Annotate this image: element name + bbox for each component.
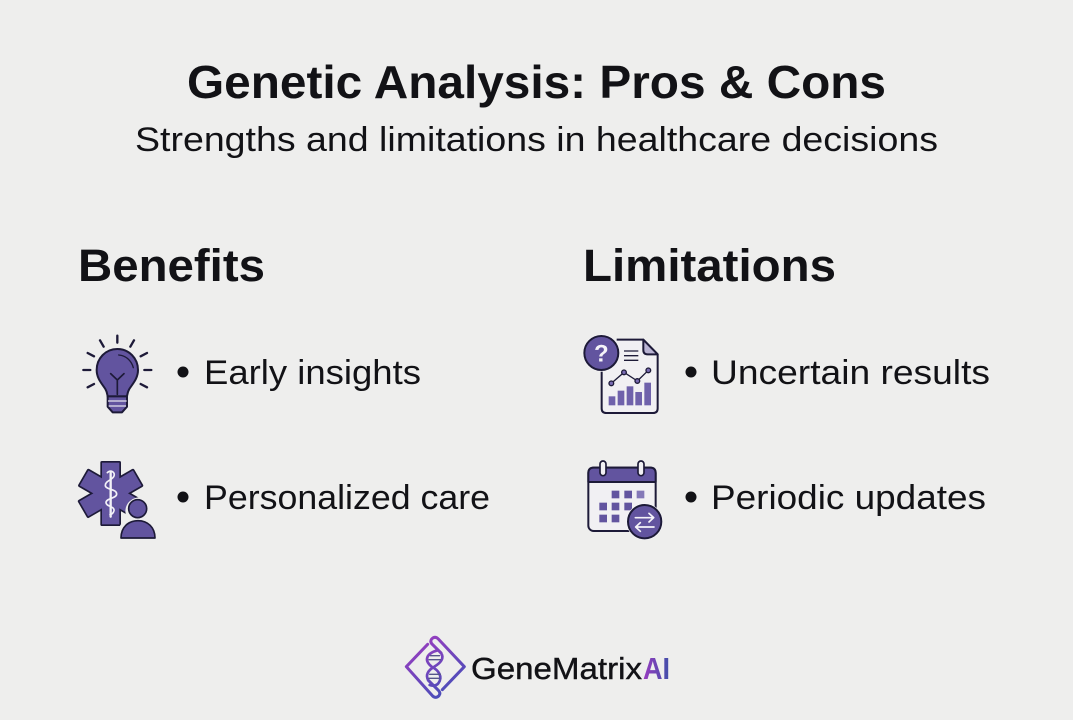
icon: calendar with sync arrows bbox=[588, 461, 663, 540]
logo: GeneMatrixAI bbox=[406, 637, 670, 697]
title: Genetic Analysis: Pros & Cons bbox=[187, 56, 886, 108]
subtitle: Strengths and limitations in healthcare decisions bbox=[135, 121, 938, 159]
wordmark: GeneMatrix bbox=[471, 651, 643, 686]
bullet bbox=[178, 366, 188, 378]
bullet bbox=[686, 492, 696, 502]
heading: benefits: Benefits bbox=[78, 240, 265, 291]
icon: medical star and person bbox=[79, 463, 159, 540]
wordmark accent: AI: AI bbox=[643, 651, 670, 686]
icon: report with question mark: ? bbox=[594, 340, 609, 367]
icon: light bulb bbox=[83, 336, 151, 412]
text: early insights: Early insights bbox=[204, 354, 421, 392]
text: personalized care: Personalized care bbox=[204, 479, 490, 517]
text: uncertain results: Uncertain results bbox=[711, 354, 990, 392]
text: periodic updates: Periodic updates bbox=[711, 479, 986, 517]
bullet bbox=[686, 366, 696, 378]
icon: report with question mark bbox=[583, 334, 658, 413]
heading: limitations: Limitations bbox=[583, 240, 836, 291]
icon: diamond DNA mark bbox=[406, 637, 464, 697]
bullet bbox=[178, 492, 188, 502]
